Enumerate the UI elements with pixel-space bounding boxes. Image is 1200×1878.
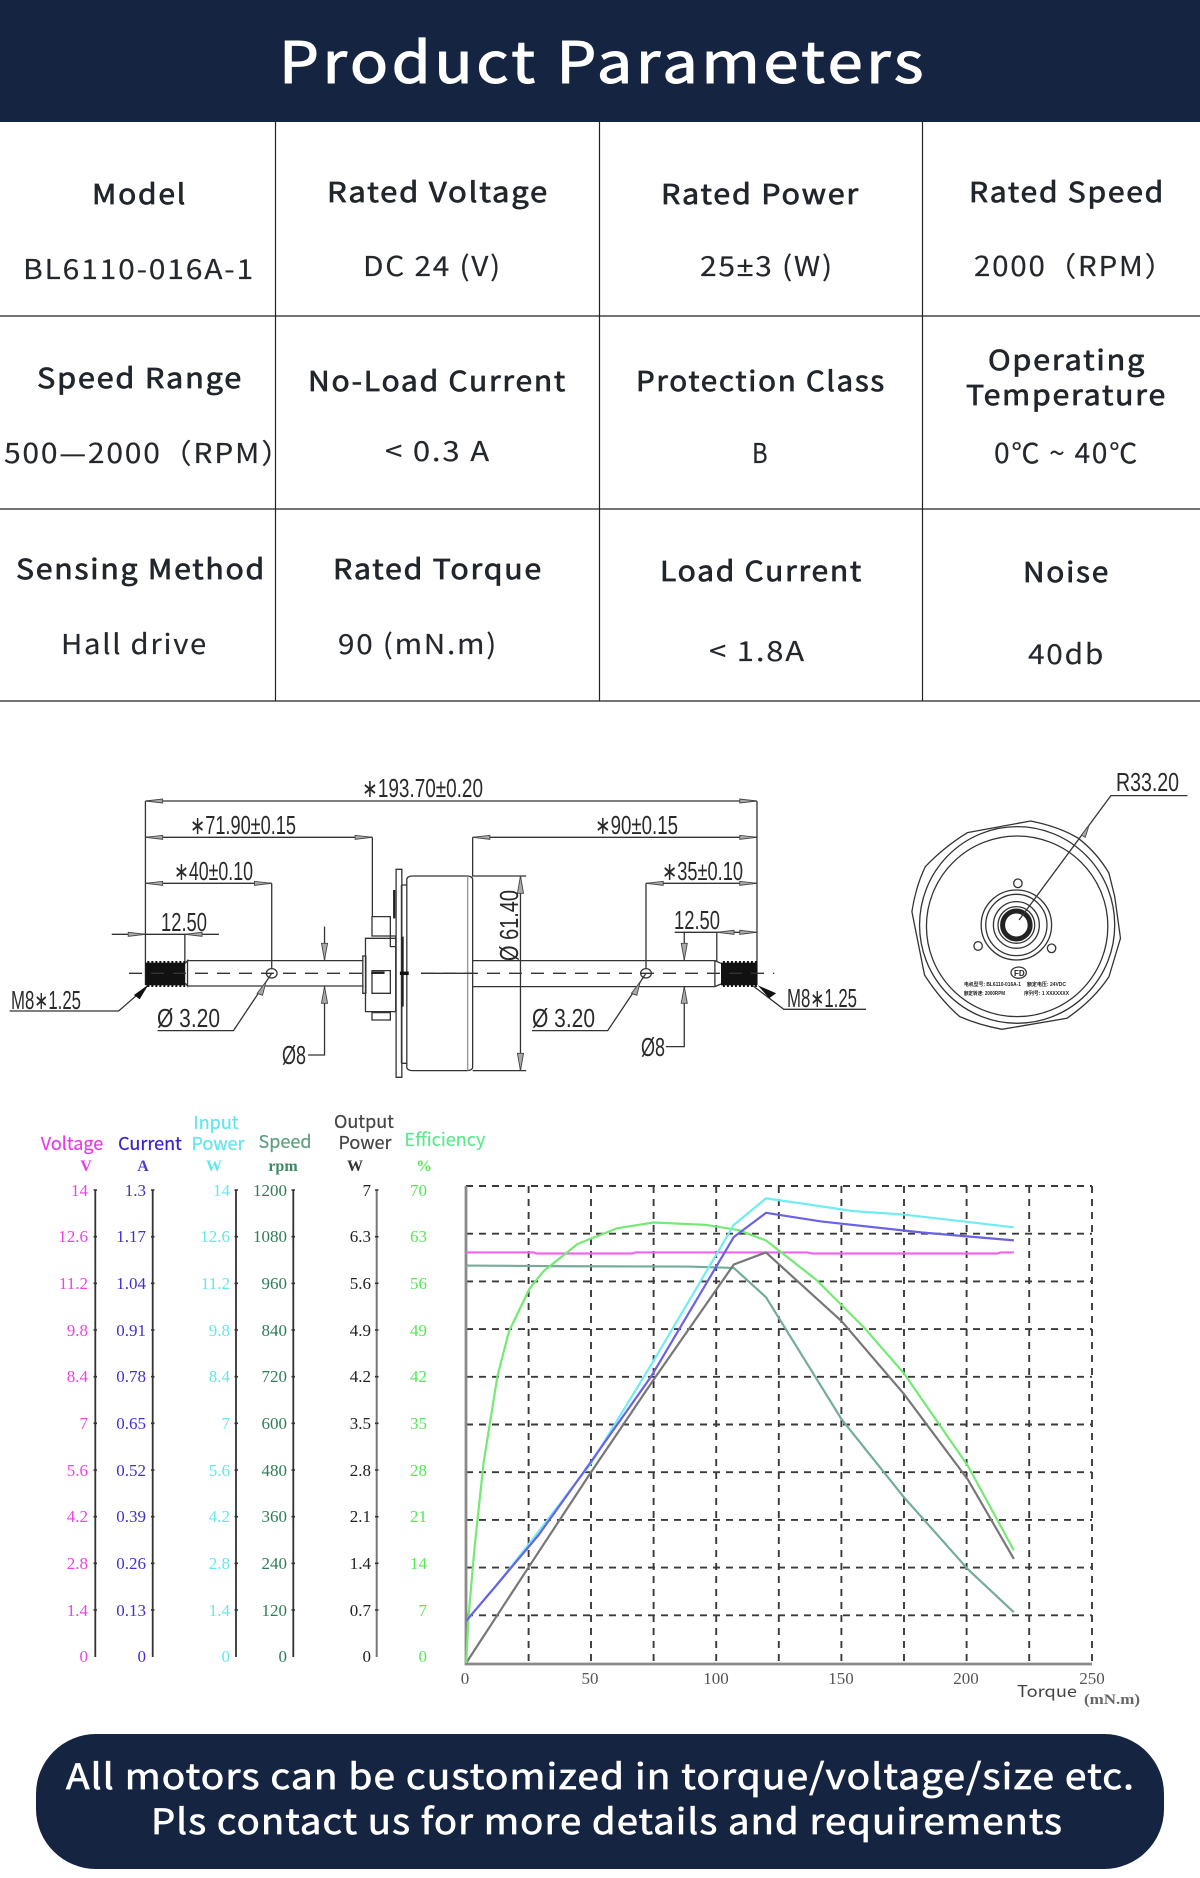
current scale: 0.78 [116,1367,146,1386]
curve: current [466,1213,1014,1621]
cell: rated torque: 90 (mN.m) [338,622,498,662]
input power scale: 2.8 [209,1554,230,1573]
dimension labels: ∗193.70±0.20 [362,775,483,803]
voltage scale: 8.4 [67,1367,88,1386]
cell: sensing method: Sensing Method [16,547,266,587]
cell: rated voltage [327,170,549,284]
cell: model: BL6110-016A-1 [23,247,255,287]
speed scale: 480 [262,1461,287,1480]
output power scale: 7 [362,1181,372,1200]
cell: rated speed: Rated Speed [969,170,1165,210]
dimension labels: 12.50 [674,907,720,935]
cell: protection class: Protection Class [636,359,886,399]
output power scale: 0 [362,1647,371,1666]
x axis labels: 50 [582,1669,598,1688]
cell: rated torque: Rated Torque [333,547,543,587]
speed scale: 360 [262,1507,287,1526]
dimension labels: ∗35±0.10 [662,858,743,886]
input power scale: 12.6 [200,1227,230,1246]
cell: no-load current: < 0.3 A [385,429,491,469]
axis headers: Speed [258,1128,312,1154]
input power scale: 4.2 [209,1507,230,1526]
dimension labels: Ø 3.20 [532,1005,595,1033]
cell: speed range: Speed Range [37,356,243,396]
nameplate text: 额定转速: 2000RPM [964,990,1005,997]
dimension labels: M8∗1.25 [787,985,857,1013]
cell: operating temperature: Operating [988,338,1146,378]
speed scale: 1200 [253,1181,287,1200]
cell: model [23,172,255,287]
cell: rated power: 25±3 (W) [700,244,834,284]
axis headers: Output [334,1108,394,1134]
voltage scale: 5.6 [67,1461,88,1480]
title: Product Parameters [279,18,927,100]
x axis labels: 250 [1079,1669,1105,1688]
input power scale: 1.4 [209,1601,230,1620]
current scale: 0.39 [116,1507,146,1526]
radius label: R33.20 [1116,769,1179,797]
performance chart [41,1108,1140,1708]
axis headers: W [347,1158,363,1175]
efficiency scale: 7 [418,1601,428,1620]
input power scale [200,1181,230,1666]
curve: speed [466,1266,1014,1612]
cell: operating temperature: Temperature [966,373,1167,413]
cell: operating temperature [966,338,1167,471]
axis headers: Current [118,1130,182,1156]
axis headers: V [80,1158,92,1175]
call to action pill [36,1734,1164,1869]
axis headers: Power [338,1129,393,1155]
output power scale: 3.5 [350,1414,371,1433]
input power scale: 0 [222,1647,230,1666]
cell: load current: Load Current [660,549,863,589]
cell: rated speed [969,170,1176,284]
speed scale: 0 [278,1647,287,1666]
nameplate text: FD [1014,969,1025,978]
speed scale: 1080 [253,1227,287,1246]
x axis labels: 200 [953,1669,979,1688]
nameplate text: 序列号: 1 XXXXXXX [1024,990,1070,997]
axis headers: rpm [268,1158,298,1175]
cell: noise [1023,550,1110,672]
x axis labels [461,1669,1105,1688]
cell: sensing method: Hall drive [61,622,208,662]
nameplate text: 额定电压: 24VDC [1027,981,1066,988]
efficiency scale: 0 [418,1647,427,1666]
cell: rated voltage: DC 24 (V) [363,244,502,284]
cell: noise: Noise [1023,550,1110,590]
speed scale: 600 [262,1414,287,1433]
header banner [0,0,1200,122]
current scale: 0.13 [116,1601,146,1620]
dimension labels [11,775,857,1070]
output power scale: 4.2 [350,1367,371,1386]
pill text line 1: All motors can be customized in torque/voltage/size etc. [66,1749,1135,1800]
output power scale: 0.7 [350,1601,372,1620]
pill text line 2: Pls contact us for more details and requirements [151,1794,1063,1845]
voltage scale: 7 [80,1414,88,1433]
dimension labels: M8∗1.25 [11,987,81,1015]
voltage scale: 11.2 [59,1274,88,1293]
current scale: 1.3 [125,1181,146,1200]
voltage scale: 1.4 [67,1601,88,1620]
side view dimension drawing [10,775,866,1077]
cell: model: Model [92,172,187,212]
voltage scale: 14 [71,1181,88,1200]
axis headers: % [416,1158,432,1175]
output power scale: 5.6 [350,1274,371,1293]
dimension labels: Ø 3.20 [157,1005,220,1033]
axis headers: W [206,1158,222,1175]
voltage scale [58,1181,88,1666]
cell: sensing method [16,547,266,662]
cell: operating temperature: 0℃ ~ 40℃ [994,431,1139,471]
voltage scale: 12.6 [58,1227,88,1246]
x axis title: Torque [1017,1678,1077,1702]
current scale: 0.91 [116,1321,146,1340]
current scale: 0 [138,1647,146,1666]
input power scale: 5.6 [209,1461,230,1480]
nameplate text: 电机型号: BL6110-016A-1 [964,981,1021,988]
speed scale: 960 [262,1274,287,1293]
cell: load current: < 1.8A [709,629,806,669]
cell: protection class: B [752,431,769,471]
axis headers: A [137,1158,149,1175]
cell: rated speed: 2000（RPM） [974,244,1176,284]
end view drawing [912,769,1187,1029]
cell: speed range [4,356,293,471]
axis headers: Input [193,1109,239,1135]
efficiency scale: 56 [410,1274,427,1293]
dimension labels: Ø8 [282,1042,306,1070]
efficiency scale: 35 [410,1414,427,1433]
curve: voltage [466,1252,1014,1253]
cell: protection class [636,359,886,471]
x axis labels: 0 [461,1669,469,1688]
curve: input power [466,1198,1014,1621]
curve: output power [466,1252,1014,1663]
curves [466,1198,1014,1663]
dimension labels: 12.50 [161,909,207,937]
output power scale: 4.9 [350,1321,371,1340]
output power scale: 2.1 [350,1507,371,1526]
dimension labels: Ø8 [641,1034,665,1062]
output power scale [350,1181,372,1666]
input power scale: 11.2 [201,1274,230,1293]
input power scale: 8.4 [209,1367,230,1386]
efficiency scale: 70 [410,1181,427,1200]
voltage scale: 0 [80,1647,88,1666]
speed scale: 120 [262,1601,287,1620]
speed scale: 840 [262,1321,287,1340]
nameplate text [964,969,1070,997]
efficiency scale [410,1181,428,1666]
cell: no-load current [308,359,567,469]
input power scale: 7 [222,1414,230,1433]
output power scale: 6.3 [350,1227,371,1246]
current scale: 0.26 [116,1554,146,1573]
curve: efficiency [466,1222,1014,1663]
speed scale [253,1181,287,1666]
voltage scale: 4.2 [67,1507,88,1526]
current scale: 1.17 [116,1227,146,1246]
speed scale: 720 [262,1367,287,1386]
current scale: 1.04 [116,1274,146,1293]
cell: load current [660,549,863,669]
x axis labels: 100 [703,1669,729,1688]
cell: speed range: 500—2000（RPM） [4,431,293,471]
axis lines [95,1190,293,1657]
current scale [116,1181,146,1666]
x axis title [1017,1678,1140,1708]
efficiency scale: 42 [410,1367,427,1386]
axis ticks [94,1190,378,1610]
speed scale: 240 [262,1554,287,1573]
motor outline and shafts [10,799,866,1077]
voltage scale: 9.8 [67,1321,88,1340]
axis headers: Voltage [41,1130,103,1156]
output power scale: 2.8 [350,1461,371,1480]
axis headers [41,1108,486,1175]
input power scale: 9.8 [209,1321,230,1340]
dimension labels: ∗90±0.15 [595,812,678,840]
x axis labels: 150 [828,1669,854,1688]
efficiency scale: 21 [410,1507,427,1526]
efficiency scale: 49 [410,1321,427,1340]
cell: rated power [661,172,860,284]
cell: rated voltage: Rated Voltage [327,170,549,210]
cell: rated power: Rated Power [661,172,860,212]
input power scale: 14 [213,1181,230,1200]
end view outline [912,796,1187,1029]
cell: noise: 40db [1028,632,1105,672]
efficiency scale: 28 [410,1461,427,1480]
axis headers: Power [191,1130,246,1156]
parameter table [0,122,1200,701]
output power scale: 1.4 [350,1554,372,1573]
current scale: 0.52 [116,1461,146,1480]
plot grid [466,1186,1092,1664]
cell: no-load current: No-Load Current [308,359,567,399]
dimension labels: Ø 61.40 [496,890,524,961]
voltage scale: 2.8 [67,1554,88,1573]
x axis title: (mN.m) [1084,1692,1140,1708]
efficiency scale: 63 [410,1227,427,1246]
cell: rated torque [333,547,543,662]
dimension labels: ∗71.90±0.15 [190,812,296,840]
axis headers: Efficiency [405,1126,486,1152]
current scale: 0.65 [116,1414,146,1433]
efficiency scale: 14 [410,1554,428,1573]
dimension labels: ∗40±0.10 [174,858,253,886]
